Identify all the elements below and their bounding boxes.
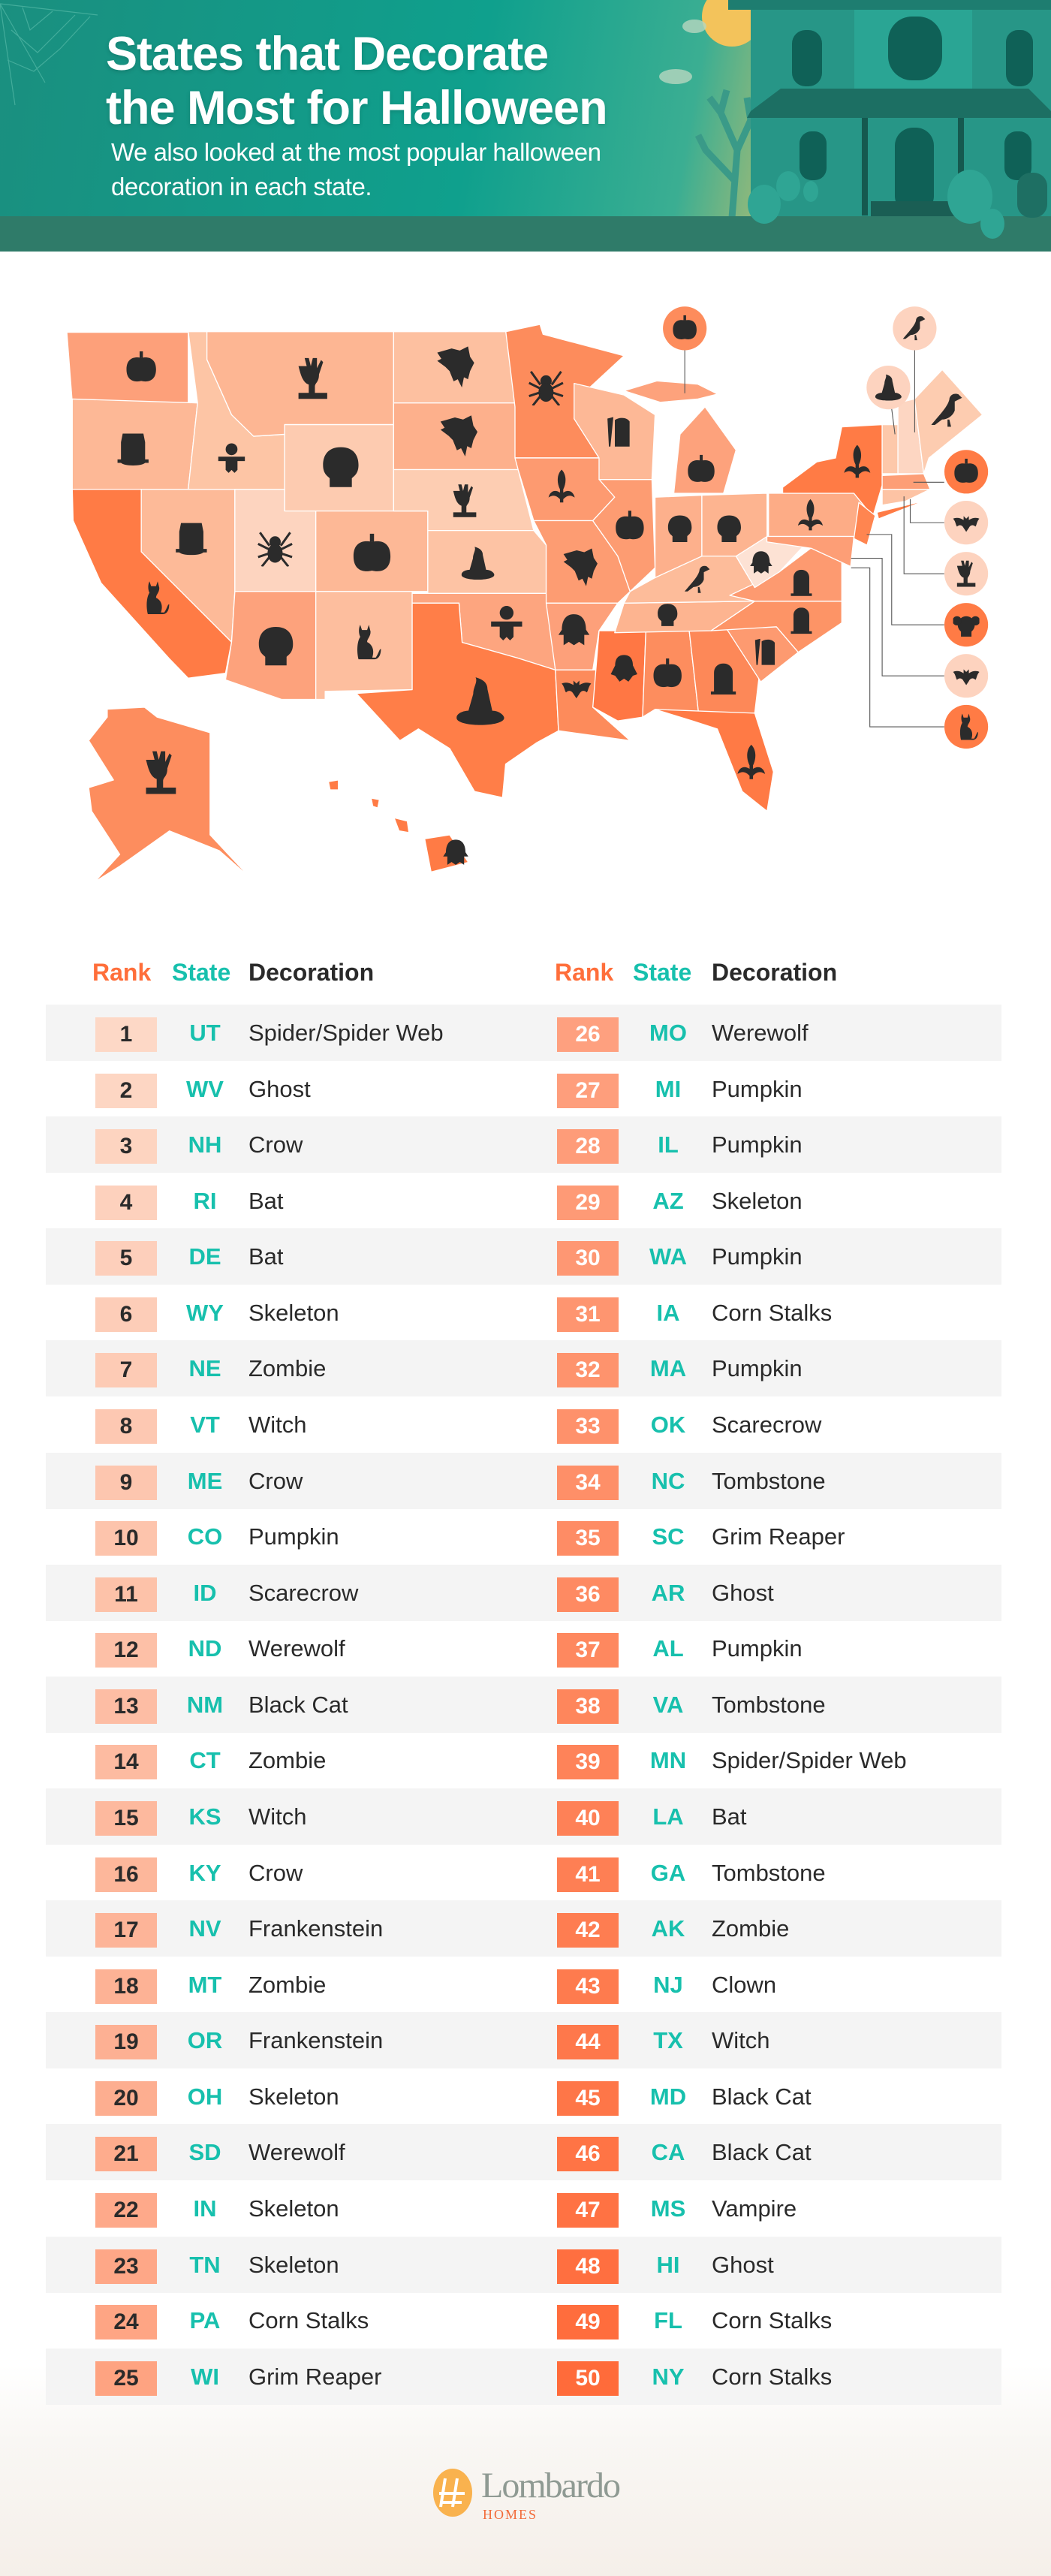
ranking table: WA [649, 1243, 687, 1270]
ranking table: MA [650, 1355, 686, 1381]
ranking table: WY [186, 1300, 224, 1326]
ranking table: HI [656, 2252, 680, 2278]
ranking table: Crow [248, 1131, 303, 1158]
ranking table: MI [655, 1076, 681, 1102]
ranking table: Skeleton [248, 1300, 339, 1326]
ranking table: Vampire [712, 2195, 797, 2222]
ranking table: 24 [113, 2309, 139, 2334]
ranking table: KY [188, 1860, 221, 1886]
table header [92, 959, 837, 986]
title: the Most for Halloween [106, 82, 607, 134]
table header: Rank [92, 959, 151, 986]
ranking table: 12 [113, 1637, 139, 1662]
ranking table: AL [652, 1635, 684, 1662]
subtitle: We also looked at the most popular halloween [111, 138, 601, 166]
title [106, 28, 607, 134]
ranking table: Scarecrow [248, 1580, 358, 1606]
ranking table: NC [652, 1468, 685, 1494]
ranking table: 33 [575, 1414, 601, 1439]
table header: Decoration [248, 959, 374, 986]
ranking table: VT [190, 1412, 220, 1438]
ranking table: RI [194, 1188, 216, 1214]
ranking table: Pumpkin [248, 1523, 339, 1550]
ranking table: 46 [575, 2141, 601, 2166]
ranking table: Werewolf [248, 2139, 345, 2165]
ranking table: Bat [712, 1803, 747, 1830]
table header: Rank [555, 959, 613, 986]
ranking table: 34 [575, 1470, 601, 1495]
ranking table: Corn Stalks [712, 2364, 832, 2390]
ranking table: 4 [120, 1190, 132, 1215]
ranking table: 35 [575, 1526, 601, 1550]
subtitle [111, 138, 601, 200]
ranking table: IN [194, 2195, 216, 2222]
ranking table: NY [652, 2364, 685, 2390]
ranking table: Zombie [248, 1972, 326, 1998]
ranking table: Pumpkin [712, 1076, 803, 1102]
ranking table: 48 [575, 2254, 601, 2279]
ranking table: Corn Stalks [712, 2307, 832, 2333]
ranking table: 11 [114, 1582, 138, 1607]
ranking table: 25 [113, 2366, 139, 2391]
ranking table: Black Cat [712, 2139, 812, 2165]
ranking table: IL [658, 1131, 679, 1158]
ranking table: 27 [575, 1078, 601, 1103]
ranking table: Ghost [248, 1076, 311, 1102]
map [68, 306, 988, 880]
ranking table: 21 [113, 2141, 139, 2166]
ranking table: Zombie [248, 1355, 326, 1381]
ranking table: MT [188, 1972, 221, 1998]
ranking table: TN [189, 2252, 221, 2278]
ranking table: Ghost [712, 2252, 774, 2278]
ranking table: Corn Stalks [712, 1300, 832, 1326]
clouds [659, 20, 706, 84]
ranking table: MD [650, 2083, 686, 2110]
ranking table: Zombie [248, 1747, 326, 1773]
ranking table: Zombie [712, 1915, 789, 1942]
title: States that Decorate [106, 28, 548, 80]
ranking table: Corn Stalks [248, 2307, 369, 2333]
ranking table: OH [188, 2083, 222, 2110]
tree [698, 90, 751, 218]
callout lines [685, 350, 944, 727]
ranking table: MS [651, 2195, 685, 2222]
ranking table: 45 [575, 2086, 601, 2111]
ranking table: Black Cat [248, 1692, 348, 1718]
ranking table: 13 [113, 1694, 139, 1719]
ranking table: SC [652, 1523, 685, 1550]
ranking table: 26 [575, 1022, 601, 1047]
ranking table: AZ [652, 1188, 684, 1214]
ranking table: 28 [575, 1134, 601, 1158]
table header: State [633, 959, 691, 986]
ranking table: Spider/Spider Web [248, 1020, 444, 1046]
ranking table: 18 [113, 1974, 139, 1999]
house [728, 0, 1051, 218]
ranking table: 37 [575, 1637, 601, 1662]
ranking table: NV [188, 1915, 221, 1942]
ranking table: Frankenstein [248, 2027, 383, 2053]
ranking table: 38 [575, 1694, 601, 1719]
table header: State [172, 959, 230, 986]
ranking table: NJ [653, 1972, 683, 1998]
ranking table: Skeleton [712, 1188, 803, 1214]
ranking table: AK [652, 1915, 685, 1942]
ranking table: LA [652, 1803, 684, 1830]
ranking table: 23 [113, 2254, 139, 2279]
pumpkins [748, 170, 1047, 239]
ranking table [46, 1005, 1001, 2403]
ranking table: Crow [248, 1468, 303, 1494]
subtitle: decoration in each state. [111, 173, 372, 200]
ranking table: 31 [575, 1302, 601, 1327]
ranking table: Bat [248, 1243, 284, 1270]
ranking table: 8 [120, 1414, 132, 1439]
ranking table: DE [188, 1243, 221, 1270]
ranking table: GA [651, 1860, 685, 1886]
ranking table: SD [188, 2139, 221, 2165]
ranking table: UT [189, 1020, 221, 1046]
ranking table: ID [194, 1580, 216, 1606]
ranking table: NE [188, 1355, 221, 1381]
ranking table: Werewolf [248, 1635, 345, 1662]
ranking table: 15 [113, 1806, 139, 1830]
logo text: Lombardo [481, 2466, 619, 2505]
ranking table: Pumpkin [712, 1355, 803, 1381]
ranking table: 1 [120, 1022, 132, 1047]
ranking table: Witch [248, 1412, 306, 1438]
ground [0, 216, 1051, 252]
ranking table: 9 [120, 1470, 132, 1495]
ranking table: Skeleton [248, 2083, 339, 2110]
ranking table: 40 [575, 1806, 601, 1830]
ranking table: 32 [575, 1357, 601, 1382]
ranking table: VA [653, 1692, 683, 1718]
ranking table: Witch [248, 1803, 306, 1830]
ranking table: TX [653, 2027, 683, 2053]
ranking table: Tombstone [712, 1468, 826, 1494]
logo mark [433, 2469, 472, 2517]
header banner [0, 0, 1051, 252]
ranking table: Werewolf [712, 1020, 809, 1046]
ranking table: KS [188, 1803, 221, 1830]
ranking table: 29 [575, 1190, 601, 1215]
map icons [118, 315, 980, 865]
ranking table: 43 [575, 1974, 601, 1999]
states [67, 324, 983, 882]
ranking table: Tombstone [712, 1860, 826, 1886]
footer logo [433, 2466, 620, 2522]
ranking table: NH [188, 1131, 221, 1158]
ranking table: CT [189, 1747, 221, 1773]
ranking table: WV [186, 1076, 224, 1102]
ranking table: 6 [120, 1302, 132, 1327]
ranking table: Pumpkin [712, 1243, 803, 1270]
ranking table: CA [652, 2139, 685, 2165]
ranking table: OR [188, 2027, 222, 2053]
ranking table: 47 [575, 2198, 601, 2222]
ranking table: Witch [712, 2027, 770, 2053]
ranking table: OK [651, 1412, 685, 1438]
ranking table: Tombstone [712, 1692, 826, 1718]
ranking table: 49 [575, 2309, 601, 2334]
footer logo: HOMES [483, 2507, 538, 2522]
ranking table: Grim Reaper [248, 2364, 381, 2390]
ranking table: Grim Reaper [712, 1523, 845, 1550]
moon [702, 0, 762, 47]
ranking table: 39 [575, 1749, 601, 1774]
ranking table: 14 [113, 1749, 139, 1774]
ranking table: Black Cat [712, 2083, 812, 2110]
ranking table: 5 [120, 1246, 132, 1270]
ranking table: 41 [575, 1862, 601, 1887]
ranking table: Crow [248, 1860, 303, 1886]
ranking table: WI [191, 2364, 219, 2390]
ranking table: Skeleton [248, 2195, 339, 2222]
ranking table: FL [654, 2307, 682, 2333]
ranking table: PA [190, 2307, 220, 2333]
ranking table: Bat [248, 1188, 284, 1214]
ranking table: 44 [575, 2029, 601, 2054]
ranking table: 3 [120, 1134, 132, 1158]
ranking table: 50 [575, 2366, 601, 2391]
ranking table: Frankenstein [248, 1915, 383, 1942]
ranking table: 36 [575, 1582, 601, 1607]
ranking table: Scarecrow [712, 1412, 821, 1438]
table header: Decoration [712, 959, 837, 986]
ranking table: Spider/Spider Web [712, 1747, 907, 1773]
ranking table: 20 [113, 2086, 139, 2111]
ranking table: 17 [113, 1918, 139, 1942]
ranking table: Skeleton [248, 2252, 339, 2278]
ranking table: NM [187, 1692, 223, 1718]
ranking table: 22 [113, 2198, 139, 2222]
ranking table: Pumpkin [712, 1635, 803, 1662]
ranking table: AR [652, 1580, 685, 1606]
ranking table: Clown [712, 1972, 776, 1998]
ranking table: 30 [575, 1246, 601, 1270]
ranking table: 19 [113, 2029, 139, 2054]
callout circles [663, 306, 988, 749]
ranking table: MO [649, 1020, 687, 1046]
ranking table: IA [656, 1300, 680, 1326]
ranking table: 16 [113, 1862, 139, 1887]
ranking table: 7 [120, 1357, 132, 1382]
ranking table: MN [650, 1747, 686, 1773]
ranking table: 10 [113, 1526, 139, 1550]
ranking table: Pumpkin [712, 1131, 803, 1158]
ranking table: Ghost [712, 1580, 774, 1606]
ranking table: CO [188, 1523, 222, 1550]
ranking table: ND [188, 1635, 221, 1662]
ranking table: ME [188, 1468, 222, 1494]
ranking table: 42 [575, 1918, 601, 1942]
ranking table: 2 [120, 1078, 132, 1103]
